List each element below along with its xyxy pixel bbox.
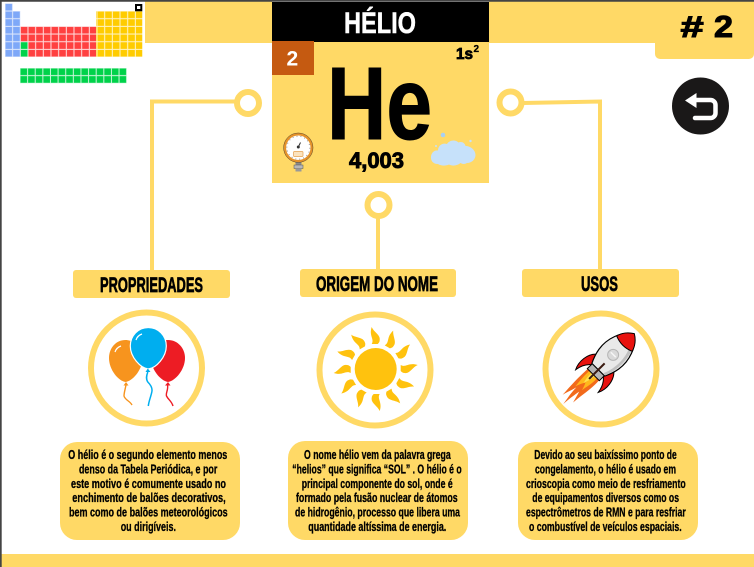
heading: origem do nome	[300, 269, 456, 297]
connector: origem do nome	[368, 194, 390, 270]
text box: origem do nome: de hidrogênio, processo que libera uma	[295, 506, 461, 520]
periodic table locator	[5, 3, 142, 83]
text box: propriedades: denso da Tabela Periódica, e por	[79, 462, 217, 476]
atomic number	[272, 41, 314, 75]
text box: usos: o combustível de veículos espaciais.	[529, 520, 682, 534]
icon: rocket	[546, 314, 656, 424]
text box: propriedades	[60, 442, 240, 540]
icon: pressure gauge	[284, 133, 313, 172]
red balloon	[151, 340, 185, 406]
title bar	[272, 2, 489, 42]
text box: propriedades: bem como de balões meteorológicos	[69, 506, 228, 520]
connector: usos	[500, 92, 600, 270]
nose cone	[615, 326, 642, 353]
title: HÉLIO	[344, 6, 416, 40]
center fin	[588, 363, 605, 380]
text box: usos	[518, 442, 698, 540]
text box: origem do nome: “helios” que significa “SOL” . O hélio é o	[292, 462, 462, 476]
text box: usos: de equipamentos diversos como os	[532, 491, 679, 505]
bottom yellow band	[0, 554, 754, 567]
text box: usos: crioscopia como meio de resfriamento	[526, 477, 686, 491]
heading: usos: USOS	[581, 273, 618, 296]
element number tab	[655, 0, 754, 59]
text box: propriedades: ou dirigíveis.	[121, 520, 176, 534]
atomic mass: 4,003	[349, 148, 404, 173]
electron configuration: 1s	[456, 46, 473, 63]
text box: propriedades: este motivo é comumente usado no	[71, 477, 226, 491]
nozzle	[587, 363, 605, 381]
icon: back button	[672, 78, 729, 134]
text box: origem do nome: quantidade altíssima de energia.	[308, 520, 446, 534]
text box: usos: espectrômetros de RMN e para resfriar	[526, 506, 686, 520]
electron configuration: 2	[474, 44, 480, 55]
text box: origem do nome: formado pela fusão nuclear de átomos	[296, 491, 458, 505]
heading: propriedades: PROPRIEDADES	[100, 274, 203, 297]
tab number: 2	[714, 9, 733, 44]
tab number: #	[680, 11, 703, 44]
blue balloon	[130, 328, 166, 406]
text box: origem do nome: principal componente do sol, onde é	[302, 477, 453, 491]
heading: usos	[522, 269, 679, 297]
body	[588, 324, 644, 380]
text box: origem do nome: O nome hélio vem da palavra grega	[304, 448, 451, 462]
text box: usos: Devido ao seu baixíssimo ponto de	[534, 448, 677, 462]
window	[605, 347, 621, 363]
left fin	[574, 350, 600, 375]
heading: propriedades	[73, 270, 230, 298]
element symbol: He	[327, 46, 432, 161]
icon: cloud	[431, 133, 476, 166]
text box: propriedades: O hélio é o segundo elemento menos	[68, 448, 227, 462]
atomic number: 2	[286, 48, 298, 70]
tab number	[680, 9, 733, 44]
element card	[272, 2, 489, 183]
text box: usos: congelamento, o hélio é usado em	[535, 462, 676, 476]
text box: origem do nome	[288, 441, 468, 540]
connector: propriedades	[152, 92, 259, 271]
electron configuration	[456, 44, 480, 63]
heading: origem do nome: ORIGEM DO NOME	[316, 273, 438, 296]
right fin	[593, 368, 618, 394]
icon: balloons	[91, 312, 202, 424]
top yellow band	[145, 0, 659, 43]
icon: sun	[320, 314, 430, 426]
flames	[558, 368, 600, 410]
orange balloon	[109, 340, 142, 405]
text box: propriedades: enchimento de balões decorativos,	[72, 491, 226, 505]
